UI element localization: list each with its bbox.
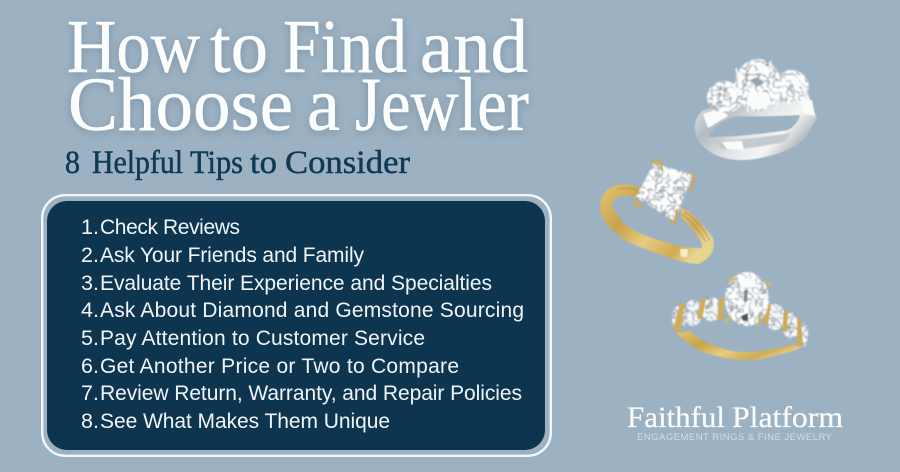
title [67, 5, 529, 147]
tip text: See What Makes Them Unique [100, 410, 390, 433]
tip text [100, 216, 524, 433]
icon: gold radiant-cut solitaire ring [600, 160, 714, 264]
panel: tips list [42, 195, 551, 456]
icon: gold oval diamond ring with side stones [672, 272, 808, 360]
panel outline [42, 195, 551, 456]
logo: Faithful Platform [627, 401, 843, 443]
tip numbers: 5. [81, 326, 99, 350]
title: a [307, 63, 340, 147]
title: Choose [68, 63, 293, 147]
logo tagline: ENGAGEMENT RINGS & FINE JEWELRY [637, 432, 833, 443]
stones [707, 59, 809, 113]
side stones [672, 297, 808, 347]
tip text: Evaluate Their Experience and Specialties [100, 272, 492, 295]
icon: silver three-stone ring [695, 59, 817, 160]
tip text: Pay Attention to Customer Service [100, 327, 425, 350]
tip text: Ask Your Friends and Family [100, 244, 364, 267]
tip text: Check Reviews [100, 216, 240, 239]
subtitle: Helpful [92, 145, 183, 181]
panel fill [47, 201, 545, 450]
logo wordmark [627, 401, 843, 434]
title: How [67, 5, 200, 89]
tip numbers: 4. [81, 298, 99, 322]
subtitle [65, 145, 410, 181]
tip numbers: 6. [81, 354, 99, 378]
logo wordmark: Faithful [627, 401, 725, 434]
tip text: Review Return, Warranty, and Repair Policies [100, 382, 522, 405]
title: to [210, 5, 268, 89]
subtitle: Tips [190, 145, 243, 181]
subtitle: to [250, 145, 277, 181]
tip text: Get Another Price or Two to Compare [100, 355, 459, 378]
stone [636, 163, 693, 221]
logo wordmark: Platform [732, 401, 843, 434]
subtitle: Consider [285, 145, 410, 181]
tip numbers: 8. [81, 409, 99, 433]
tip numbers [81, 215, 99, 433]
tip numbers: 1. [81, 215, 99, 239]
title: Find [283, 5, 407, 89]
tip numbers: 3. [81, 271, 99, 295]
title: and [420, 5, 528, 89]
tip numbers: 7. [81, 381, 99, 405]
tip text: Ask About Diamond and Gemstone Sourcing [100, 299, 524, 322]
subtitle: 8 [65, 145, 80, 181]
title: Jewler [355, 63, 529, 147]
tip numbers: 2. [81, 243, 99, 267]
center stone [725, 272, 769, 326]
